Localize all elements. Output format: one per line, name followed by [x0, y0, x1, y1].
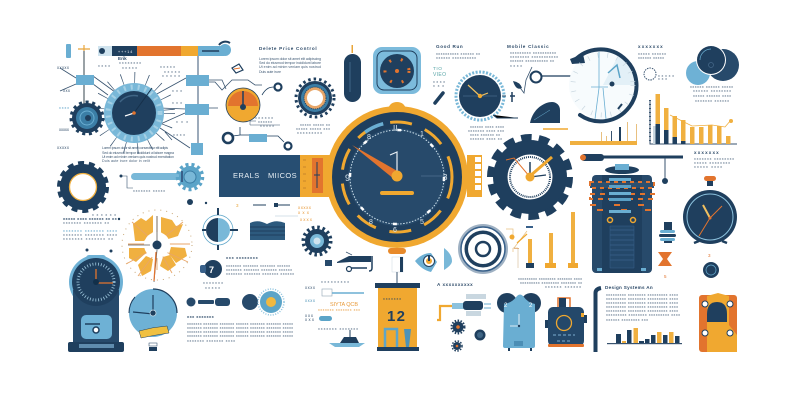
ERALS MIICOS panel: ERALS	[233, 171, 260, 180]
text block under dial: Ut enim ad minim veniam quis nostrud exercitation	[102, 155, 174, 159]
top scale bar	[66, 42, 231, 150]
small blue text column: VIEO	[433, 72, 446, 78]
orange hourglass: 5	[664, 274, 667, 279]
ring and leaf icons	[510, 67, 604, 102]
blue boiler	[497, 293, 541, 351]
left rows of labels: xxxxxxxxx	[321, 280, 349, 284]
number 7 badge: 7	[209, 265, 214, 275]
right text: xxxxxxx xxxxxxxx	[694, 157, 734, 161]
top centre dial	[456, 72, 518, 120]
left rows of labels	[305, 280, 364, 331]
ERALS MIICOS panel: MIICOS	[268, 171, 297, 180]
small gear icon and label	[644, 68, 674, 81]
heading text top	[259, 46, 321, 74]
stacked blue knob	[659, 222, 676, 243]
right of dial text: xxxxxxxx xxxxxxxxxxx	[510, 55, 558, 59]
right of dial text: xxxxxx xxxxxxxxxx xx	[510, 59, 554, 63]
left rows of labels: xxxx	[305, 285, 316, 290]
blue key gear: xxxxxxx xxxxx	[133, 189, 165, 193]
lower centre text: xxxxxxx xxxxxxx xxxxxxx xxxxxx xxxxxxx xxxxxxx xxxxx	[187, 326, 293, 330]
left labels: xxxxx	[57, 145, 70, 150]
left labels: xxx	[172, 101, 182, 105]
right of dial text: xxxxxxxxx xxxxxxxxxx	[510, 51, 556, 55]
navy machine with dial	[68, 255, 124, 352]
lower centre text: xxxxxxx xxxxxxx xxxx	[187, 339, 235, 343]
left rows of labels: xxx	[305, 313, 314, 318]
yellow posts	[506, 212, 578, 268]
top right text	[638, 44, 666, 60]
top right text: xxxxxxx	[638, 44, 663, 49]
crank and small gears: A xxxxxxxxxx	[437, 282, 473, 287]
left labels: xxxxx	[57, 65, 70, 70]
text block under dial: Duis aute irure dolor in velit	[102, 159, 150, 163]
gear with orange ring	[296, 79, 334, 117]
ERALS MIICOS panel	[219, 155, 300, 197]
dark dome	[530, 102, 568, 129]
right of dial text	[507, 44, 558, 68]
yellow tower: 12	[387, 308, 405, 325]
left lower text: xxxxxxx xxxxxxx xx	[63, 237, 113, 241]
text above camera: xxxxxxxxx xxxxxxxx xxxxxxx xx	[520, 281, 582, 285]
lower centre text: xxx xxxxxxx	[187, 315, 215, 319]
small gear icon and label: xxx	[658, 77, 667, 81]
bottom right panel with chart: xxxxxxxxx xxxxxxxx xxxxxxxxx xxxx	[606, 305, 678, 309]
small gear icon and label: xxxxx	[658, 74, 674, 78]
bottom right panel with chart	[596, 285, 682, 352]
left labels: xxx	[63, 88, 71, 93]
number 7 badge: xxxxx	[205, 286, 220, 290]
dark ring button: 3	[708, 253, 711, 258]
open book	[250, 221, 285, 240]
bottom right panel with chart: xxxxxxxxx xxxxxxxx xxxxxxxxx xxxx	[606, 313, 680, 317]
number 7 badge	[200, 260, 223, 290]
text block under dial: Sed do eiusmod tempor incididunt ut labore magna	[102, 151, 174, 155]
connector lines and blue boxes	[60, 68, 262, 155]
text under circles: xxxxxxx xxxxxx	[695, 99, 729, 103]
camera device	[545, 298, 587, 347]
text beside 7: xxxxxxx xxxxxxx xxxxxxx xxxxxx	[226, 264, 290, 268]
bottom right panel with chart: xxxxxx xxxxxxxx xxx	[606, 318, 648, 322]
central big clock: 6	[393, 227, 397, 234]
left lower text	[63, 213, 120, 252]
small machine icon	[325, 252, 372, 272]
blue key gear	[120, 164, 207, 205]
big arc clock	[569, 49, 637, 121]
top strip labels: xxx	[298, 210, 310, 215]
orange hourglass	[658, 252, 672, 279]
left lower text: xxxxx xxxx xxxxxx xx xx	[63, 217, 118, 221]
eye-shaped gauge	[415, 248, 452, 272]
right text: xxxxx xxxxxxxx	[694, 161, 730, 165]
central big clock	[326, 102, 468, 254]
left rows of labels: xxxxxxx xxxxxxx	[318, 327, 358, 331]
small yellow base chart	[570, 122, 637, 145]
text beside 7: xxx xxxxxxxx	[226, 256, 259, 260]
lower centre text: xxxxxxx xxxxxxx xxxxxxx xxxxxx xxxxxxx xxxxxxx xxxxx	[187, 330, 293, 334]
left labels: xxxxx	[164, 70, 180, 74]
bottom right panel with chart: Design Systems An	[605, 285, 653, 290]
right text: xxxxxxx	[694, 150, 719, 155]
heading text top: Duis aute irure	[259, 70, 281, 74]
neck connector	[392, 257, 403, 283]
right strap	[467, 155, 482, 197]
right alarm clock	[683, 176, 737, 244]
text under top dial: xxxx xxxxxx xx	[470, 133, 500, 137]
overlapping circles	[686, 45, 739, 85]
text above camera: xxxxxx xxxxxx	[545, 285, 581, 289]
left labels: xxxx	[98, 64, 110, 68]
left labels: xxxxx	[59, 127, 70, 132]
yellow tower	[375, 283, 420, 351]
left labels	[57, 56, 188, 150]
text beside 7: xxxxxxx xxxxxxx xxxxxxx xxxxxx	[226, 272, 294, 276]
small gear centre	[304, 228, 330, 254]
left gear	[72, 102, 102, 134]
large top-right gear clock	[490, 138, 570, 216]
text under circles	[690, 85, 733, 103]
callout text: gauge labels: xxxxxx	[258, 120, 272, 124]
small ring connectors	[223, 64, 292, 150]
capsule icon	[344, 45, 361, 102]
central big clock: 8	[369, 219, 373, 226]
left gear with yellow ring	[59, 163, 107, 211]
left lower text: xxxxxx	[92, 213, 116, 217]
orange device	[699, 293, 737, 352]
right of dial text: xxxx	[510, 64, 522, 68]
small blue text column	[433, 44, 480, 88]
text beside 7: xxxxxxx xxxxxxx xxxxxxx xxxxxx	[226, 268, 292, 272]
text below gear: xxxxxxxxx	[297, 131, 322, 135]
top strip labels: 3	[236, 203, 239, 208]
battery tank	[590, 164, 654, 273]
text below gear: xxxxx xxxxx xx	[300, 123, 330, 127]
bottom right panel with chart: xxxxxxxxx xxxxxxxx xxxxxxxxx xxxx	[606, 309, 678, 313]
lower centre text	[187, 315, 293, 343]
yellow sunburst	[122, 210, 192, 282]
central big clock: 5	[420, 219, 424, 226]
blue round clock	[129, 289, 177, 351]
blue boiler: 2	[504, 303, 508, 309]
small blue text column: xxxxxx xxxxxxxxxx	[436, 56, 476, 60]
text block under dial: Lorem ipsum dolor sit amet consectetur elit adipis	[102, 146, 168, 150]
left rows of labels: xxxxxxx xxxxxxx xxx	[318, 308, 360, 312]
text under top dial	[468, 125, 504, 141]
lever arm	[580, 154, 683, 184]
left labels: xxxxx	[160, 65, 175, 69]
small blue text column: xxx	[433, 84, 444, 88]
left labels: xxxxx	[162, 74, 180, 78]
top right text: xxxxx xxxxxx	[638, 52, 666, 56]
large concentric ring	[458, 224, 508, 274]
boat icon	[329, 330, 365, 347]
yellow tower: xxxxxxx	[383, 297, 401, 301]
small blue text column: Good Run	[436, 44, 463, 49]
lower centre text: xxxxxxx xxxxxxx xxxxxxx xxxxxx xxxxxxx xxxxxxx xxxxx	[187, 322, 293, 326]
text above camera	[518, 277, 582, 289]
top strip labels: xxxxx	[298, 205, 312, 210]
left strap	[300, 155, 330, 197]
left labels: Erik	[118, 56, 127, 61]
left lower text: xxxxxxx xxxxxxx xxxx	[63, 229, 117, 233]
crank and small gears	[437, 282, 491, 351]
heading text top: Sed do eiusmod tempor incididunt labore	[259, 61, 321, 65]
text under top dial: xxxxxxx xxxx xxx	[468, 129, 504, 133]
bottom right panel with chart: xxxxxxxxx xxxxxxxx xxxxxxxxx xxxx	[606, 301, 678, 305]
left rows of labels: xxx	[305, 317, 315, 322]
central big clock: II	[393, 124, 397, 133]
top right text: xxxxxx xxxxx	[638, 56, 664, 60]
right text: xxxxx xxxx	[694, 165, 722, 169]
orange gauge	[226, 88, 260, 122]
top scale bar: + + + 1 4	[118, 50, 132, 54]
small blue text column: xxxxxxxxxx xxxxxx xx	[436, 52, 480, 56]
left labels: xxx	[172, 89, 182, 93]
left labels: xxxxxxxx	[119, 61, 141, 65]
diagonal pill	[435, 93, 443, 103]
text under circles: xxxxx xxxxxx xxxx	[693, 94, 731, 98]
bottom right panel with chart: xxxxxxxxx xxxxxxxx xxxxxxxxx xxxx	[606, 297, 678, 301]
left rows of labels: xxxx	[305, 298, 316, 303]
text under top dial: xxxxxx xxxx xxxx	[470, 125, 504, 129]
callout text: gauge labels: xxxxx	[260, 124, 274, 128]
small blue text column: TIO	[433, 66, 442, 72]
text above camera: xxxxxxxxx xxxxxxxx xxxxxxx xxxx	[518, 277, 582, 281]
number 7 badge: xxxxxxx	[203, 281, 223, 285]
central big clock: 3	[443, 173, 448, 182]
central big clock: 9	[345, 173, 350, 183]
rounded-square gauge	[373, 47, 421, 94]
left labels: xxxxx	[122, 66, 137, 70]
dark ring button	[703, 253, 719, 278]
text below gear: xxxxx xxxxx xxx	[296, 127, 330, 131]
top strip labels: xxxx	[300, 217, 313, 222]
text block under dial	[102, 146, 174, 163]
half-moon dial	[202, 208, 238, 250]
central big clock: 8	[367, 134, 371, 141]
text beside 7	[226, 256, 294, 276]
heading text top: Ut enim ad minim veniam quis nostrud	[259, 65, 321, 69]
main blue dial	[99, 78, 169, 148]
heading text top: Delete Price Control	[259, 46, 317, 51]
small blue text column: xxxx	[433, 80, 445, 84]
capsule and sun row	[186, 289, 284, 315]
callout text: gauge labels	[250, 116, 280, 128]
left lower text: xxxxxxx xxxxxxx xx	[63, 221, 109, 225]
heading text top: Lorem ipsum dolor sit amet elit adipiscing	[259, 57, 321, 61]
left labels: xxxx	[59, 106, 69, 110]
bar chart	[650, 94, 737, 144]
left labels: xxx	[176, 120, 188, 124]
lower centre text: xxxxxxx xxxxxxx xxxxxxx xxxxxx xxxxxxx xxxxxxx xxxxx	[187, 334, 293, 338]
text under circles: xxxxxx xxxxxx xxxxx	[690, 85, 733, 89]
callout text: gauge labels: xxxxxx	[255, 116, 273, 120]
text below gear	[296, 123, 330, 135]
left lower text: xxxxxxx xxxxxxx xxxx	[63, 233, 117, 237]
left rows of labels: SIYTA QCB	[330, 302, 358, 308]
text under circles: xxxxxx xxxxxxxx	[693, 89, 731, 93]
right text	[694, 150, 734, 169]
central big clock: 1	[420, 131, 424, 138]
bottom right panel with chart: xxxxxxxxx xxxxxxxx xxxxxxxxx xxxx	[606, 293, 678, 297]
text under top dial: xxxxxx xxxx xx	[470, 137, 502, 141]
left labels: xxxx	[173, 133, 185, 137]
top strip labels	[236, 203, 313, 222]
blue boiler: 2	[529, 303, 533, 309]
right of dial text: Mobile Classic	[507, 44, 549, 49]
